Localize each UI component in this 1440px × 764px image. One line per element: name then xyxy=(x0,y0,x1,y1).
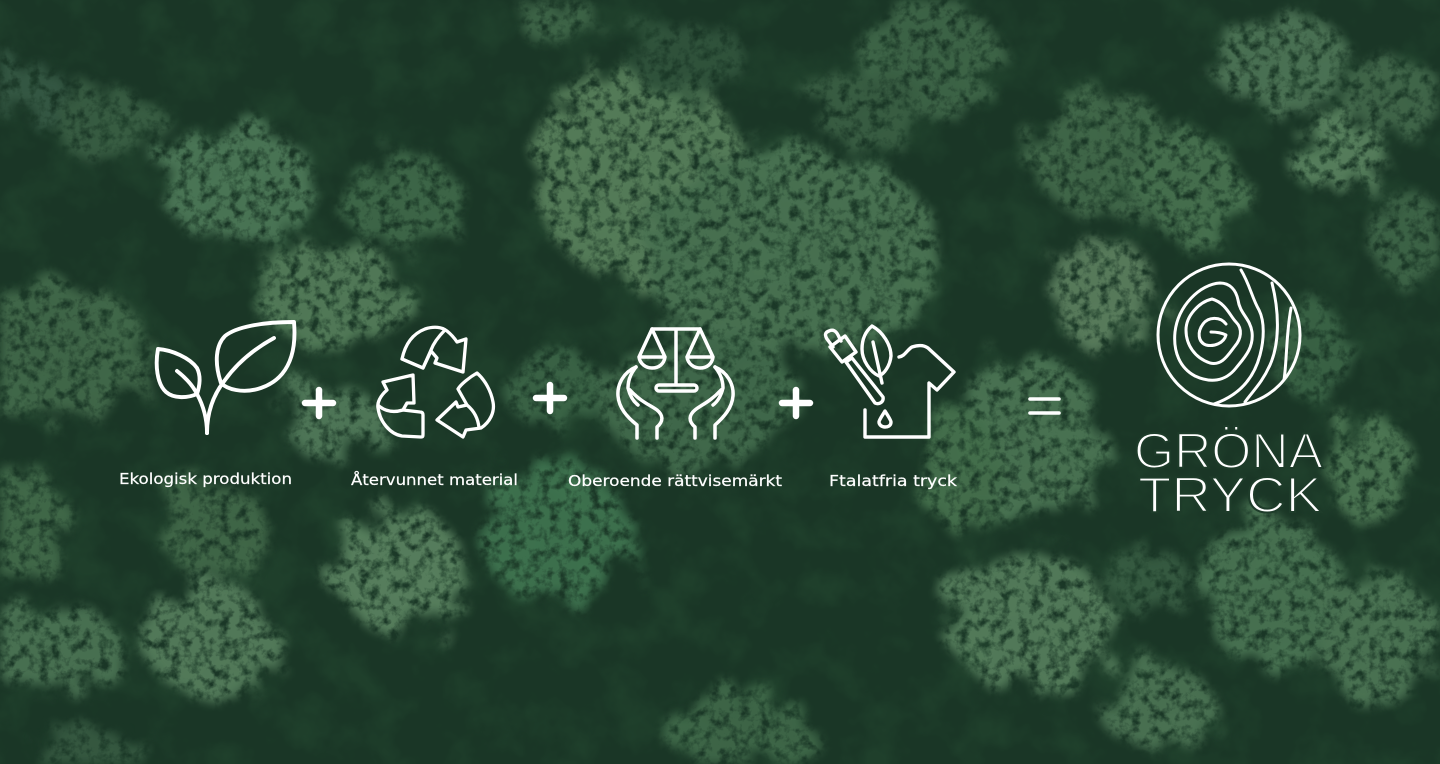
icon: scales held in hands xyxy=(618,329,733,438)
logo wordmark line 2: TRYCK xyxy=(1138,467,1322,523)
equals sign xyxy=(1030,399,1059,413)
label: Återvunnet material: Återvunnet material xyxy=(351,470,518,489)
icon: recycling arrows xyxy=(378,327,493,437)
plus sign 3 xyxy=(782,390,810,416)
logo wordmark line 1: GRÖNA xyxy=(1134,423,1324,479)
label: Oberoende rättvisemärkt: Oberoende rättvisemärkt xyxy=(568,472,782,490)
logo emblem: tree rings xyxy=(1158,264,1300,406)
icon: dropper, leaf and t-shirt xyxy=(826,326,954,437)
label: Ekologisk produktion: Ekologisk produktion xyxy=(119,470,292,488)
plus sign 2 xyxy=(536,385,564,411)
logo: Gröna Tryck xyxy=(1134,264,1324,523)
icon: sprouting leaves xyxy=(157,322,294,433)
plus sign 1 xyxy=(305,390,333,416)
label: Ftalatfria tryck: Ftalatfria tryck xyxy=(829,472,957,490)
